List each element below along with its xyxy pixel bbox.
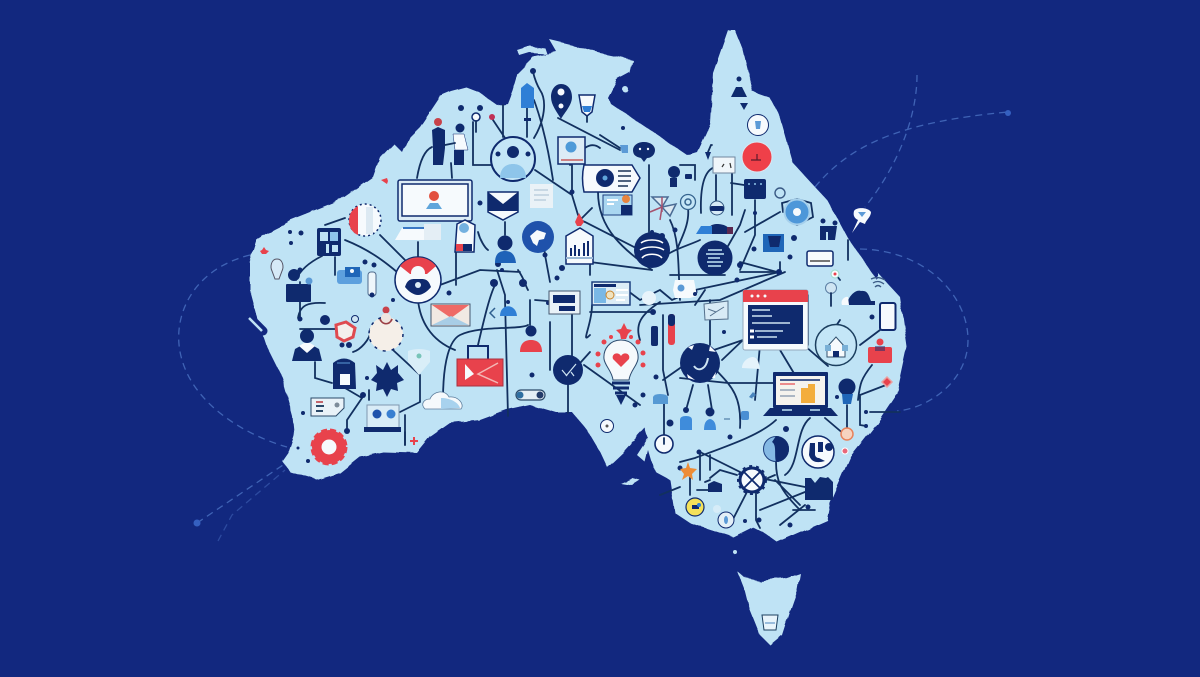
icon: cloud [423,392,462,409]
icon: red flag markers [260,178,388,254]
icon: off-map balloon [852,208,871,233]
icon: app window [317,228,341,256]
icon: white shield [408,349,430,375]
icon: data box [549,291,580,314]
icon: lollipop pin [826,270,839,306]
icon: map-side bulb outline [271,259,283,279]
icon: handshake people [432,118,468,165]
icon: small pins [472,113,495,132]
map of Australia [250,30,907,645]
icon: windmill flower [650,197,676,220]
icon: paper slip [704,301,728,320]
icon: white circle with cup [748,114,768,136]
icon: house ring [816,324,856,366]
icon: blue phone [337,267,362,284]
icon: red white circle [349,204,381,236]
icon: browser card [592,282,630,305]
icon: red briefcase [457,346,503,386]
Kangaroo island [620,478,640,485]
icon: sheep gear [369,306,403,351]
icon: x gear [738,466,766,494]
icon: white cylinder [368,272,376,298]
icon: central person ring [395,257,441,303]
icon: blue circle badge [522,221,554,253]
icon: yellow circle [686,498,704,516]
icon: white device [807,251,833,266]
icon: blue persons [680,407,749,430]
icon: blue dome small [653,394,668,404]
icon: orange star [680,462,697,480]
icon: laptop [763,372,838,416]
icon: round device head [668,165,695,187]
icon: map pin [551,84,572,119]
icon: blue camera gear [782,199,813,225]
Tasmania [738,572,800,645]
icon: navy bulb [838,378,856,404]
icon: mobile card [455,220,475,252]
icon: navy starburst [371,362,404,397]
icon: speech bubble [620,126,655,162]
icon: wifi [871,278,885,287]
icon: ring target [680,194,696,210]
icon: red diamond [882,377,892,387]
icon: navy bag lock [333,358,356,389]
icon: navy small house [697,480,722,492]
icon: navy x badge [553,355,583,385]
icon: U magnet ring [802,436,834,468]
small islands [733,550,737,554]
icon: navy list badge [698,240,732,276]
icon: bar chart house [566,213,593,264]
icon: blue square [763,234,784,252]
icon: red box [868,338,892,363]
icon: envelope shield [488,192,518,220]
icon: soft white cloud [742,357,760,399]
icon: heart lightbulb [596,323,646,405]
icon: document [530,184,553,208]
icon: red circle [742,142,772,172]
icon: navy square [744,179,785,199]
icon: seated person [286,269,312,302]
icon: envelope [431,304,470,326]
icon: white frame node [705,145,735,173]
icon: white circle coin [713,505,734,528]
network nodes [288,68,874,528]
icon: eye display [582,165,640,192]
icon: navy globe check [680,343,720,383]
mainland [250,30,907,542]
icon: desktop monitor [395,180,472,240]
icon: blue dome [490,300,517,318]
icon: monitor with two dots [364,405,401,432]
icon: top triangle person [731,76,748,110]
icon: red person [520,326,542,352]
icon: pie chart [764,436,789,462]
icon: code window [743,290,808,350]
icon: smartphone [880,303,896,330]
icon: toggle pill [516,390,545,400]
icon: Tasmania badge [762,615,778,630]
icon: red hexagon [336,316,358,341]
icon: red orange badge [841,428,853,454]
dashed orbit arcs [179,75,1011,541]
icon: glass [579,95,595,122]
icon: info card lower [311,398,344,416]
icon: red plus [405,432,418,445]
icon: info card [603,195,632,215]
icon: people group [820,218,838,240]
icon: cylinders [651,314,675,346]
icon: navy cloud [842,291,875,305]
icon: small clock left [600,420,614,432]
west coast notch and island strip [248,316,263,331]
icon: red gear [312,430,346,464]
icon: VR person [696,201,733,234]
icon: globe frame [558,137,585,164]
network connectors [296,72,900,528]
icon: blue tag [521,83,534,121]
Melville island [517,46,547,56]
icon: business person [292,329,322,361]
icon: person silhouette [495,236,516,263]
icon: navy wave badge [634,232,670,268]
icon: navy building [805,477,833,500]
icon: white cloud box [642,280,697,305]
icon: consultant circle [491,137,535,181]
icon: clock [655,435,673,453]
